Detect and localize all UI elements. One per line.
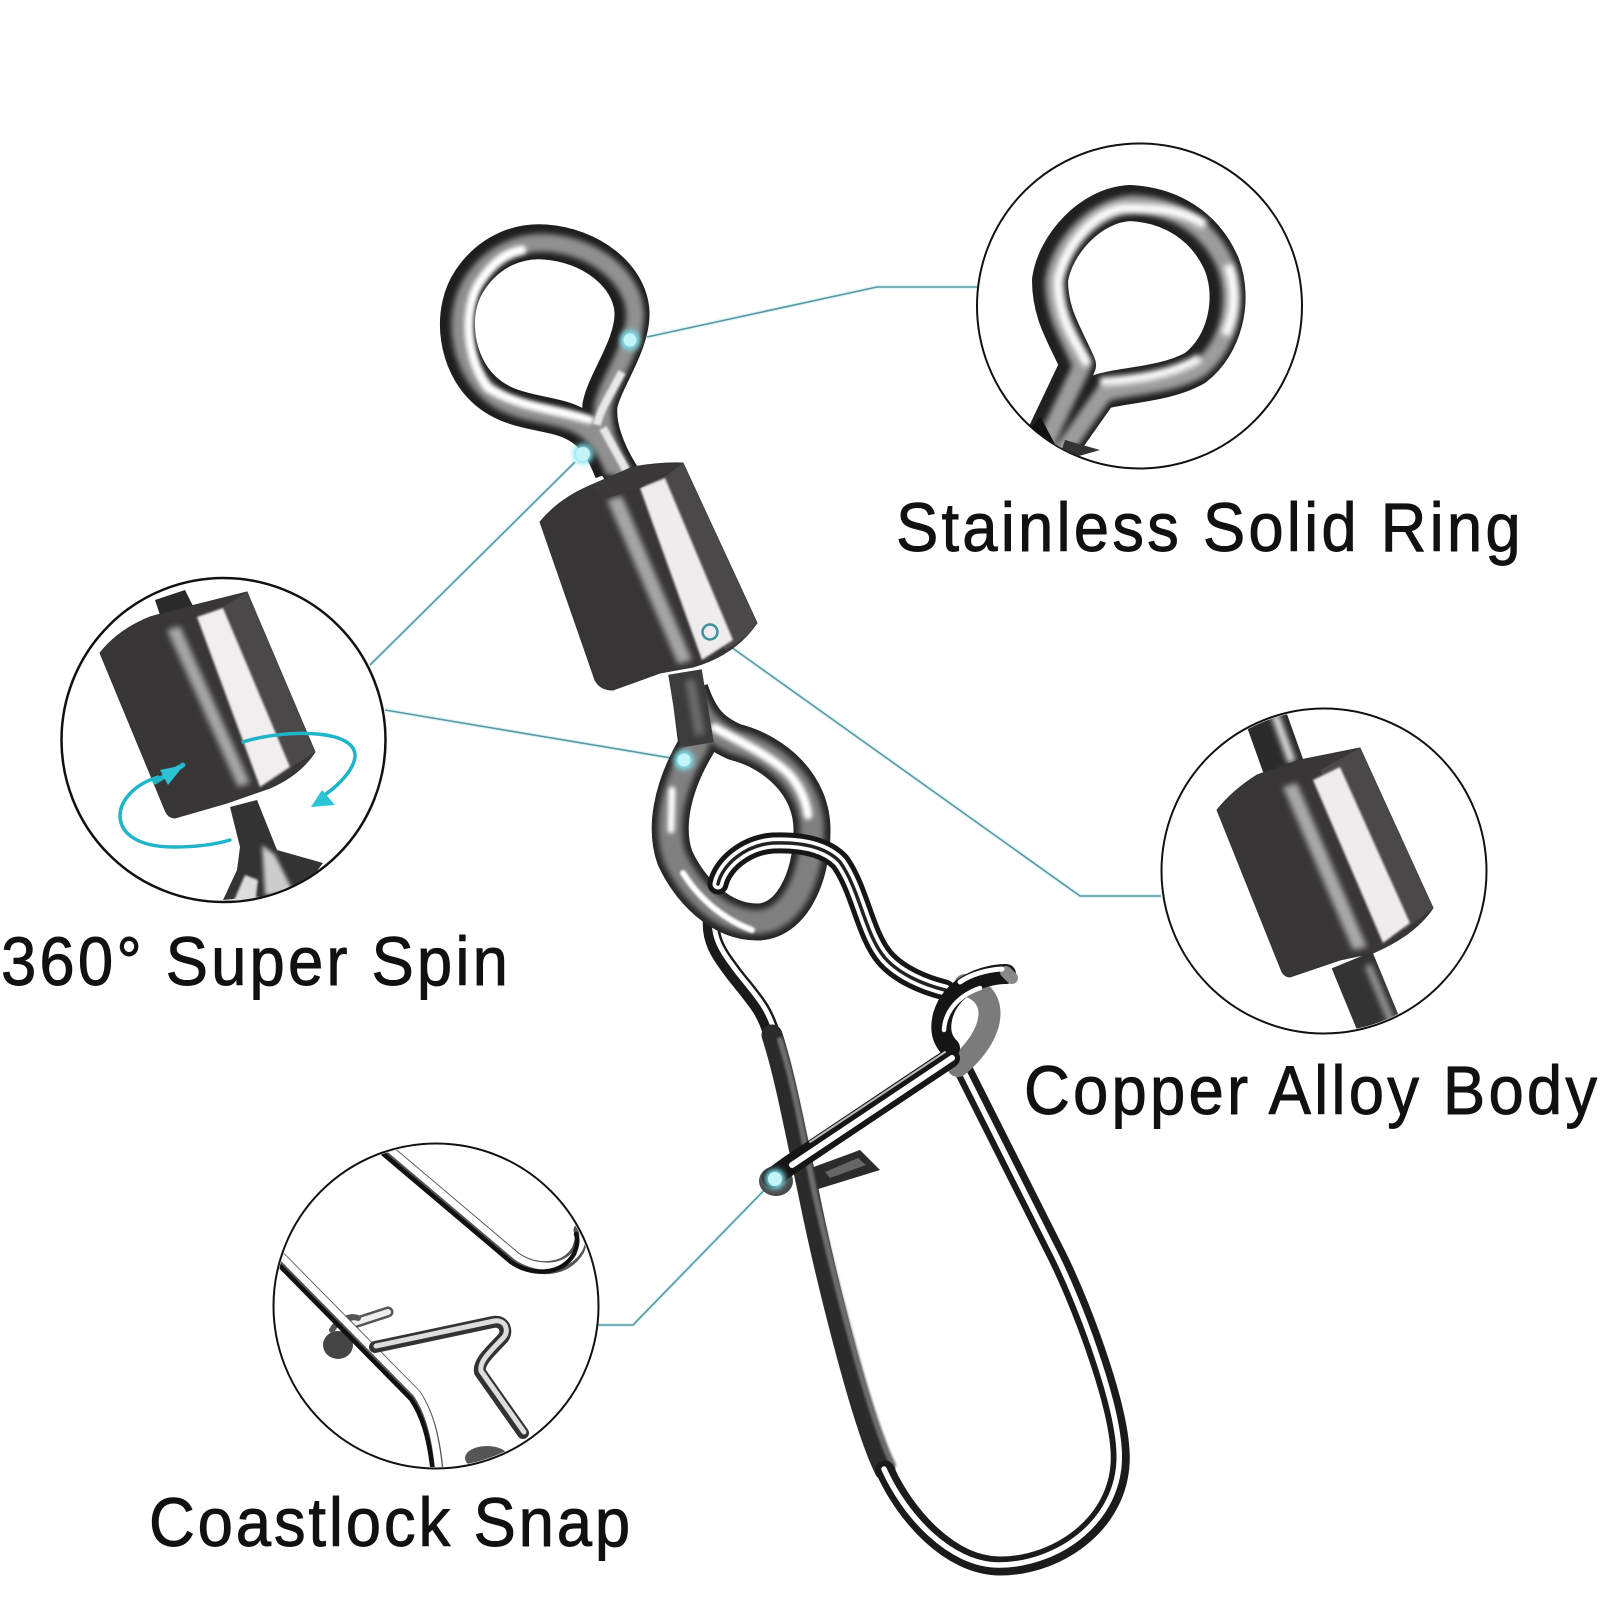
snap clip wire [711,913,1120,1566]
detail circle: 360 super spin [62,578,386,905]
label: 360 super spin: 360° Super Spin [1,924,508,1001]
main swivel: upper ring [457,242,635,479]
snap top wire over ring [718,843,945,990]
detail circle: stainless solid ring [977,144,1302,471]
label: copper alloy body: Copper Alloy Body [1024,1053,1598,1130]
snap latch bar and eye [759,1052,952,1196]
icon: rotation arrows [120,733,355,847]
callout leader lines [370,287,1161,1325]
detail circle: coastlock snap [274,1144,598,1474]
detail circle: copper alloy body [1162,708,1486,1040]
label: stainless solid ring: Stainless Solid Ring [896,490,1521,567]
callout anchor dots [573,330,785,1189]
main swivel: barrel [540,463,757,690]
main swivel: lower ring [670,672,812,930]
snap coil and hook [941,969,1012,1066]
label: coastlock snap: Coastlock Snap [149,1485,630,1562]
